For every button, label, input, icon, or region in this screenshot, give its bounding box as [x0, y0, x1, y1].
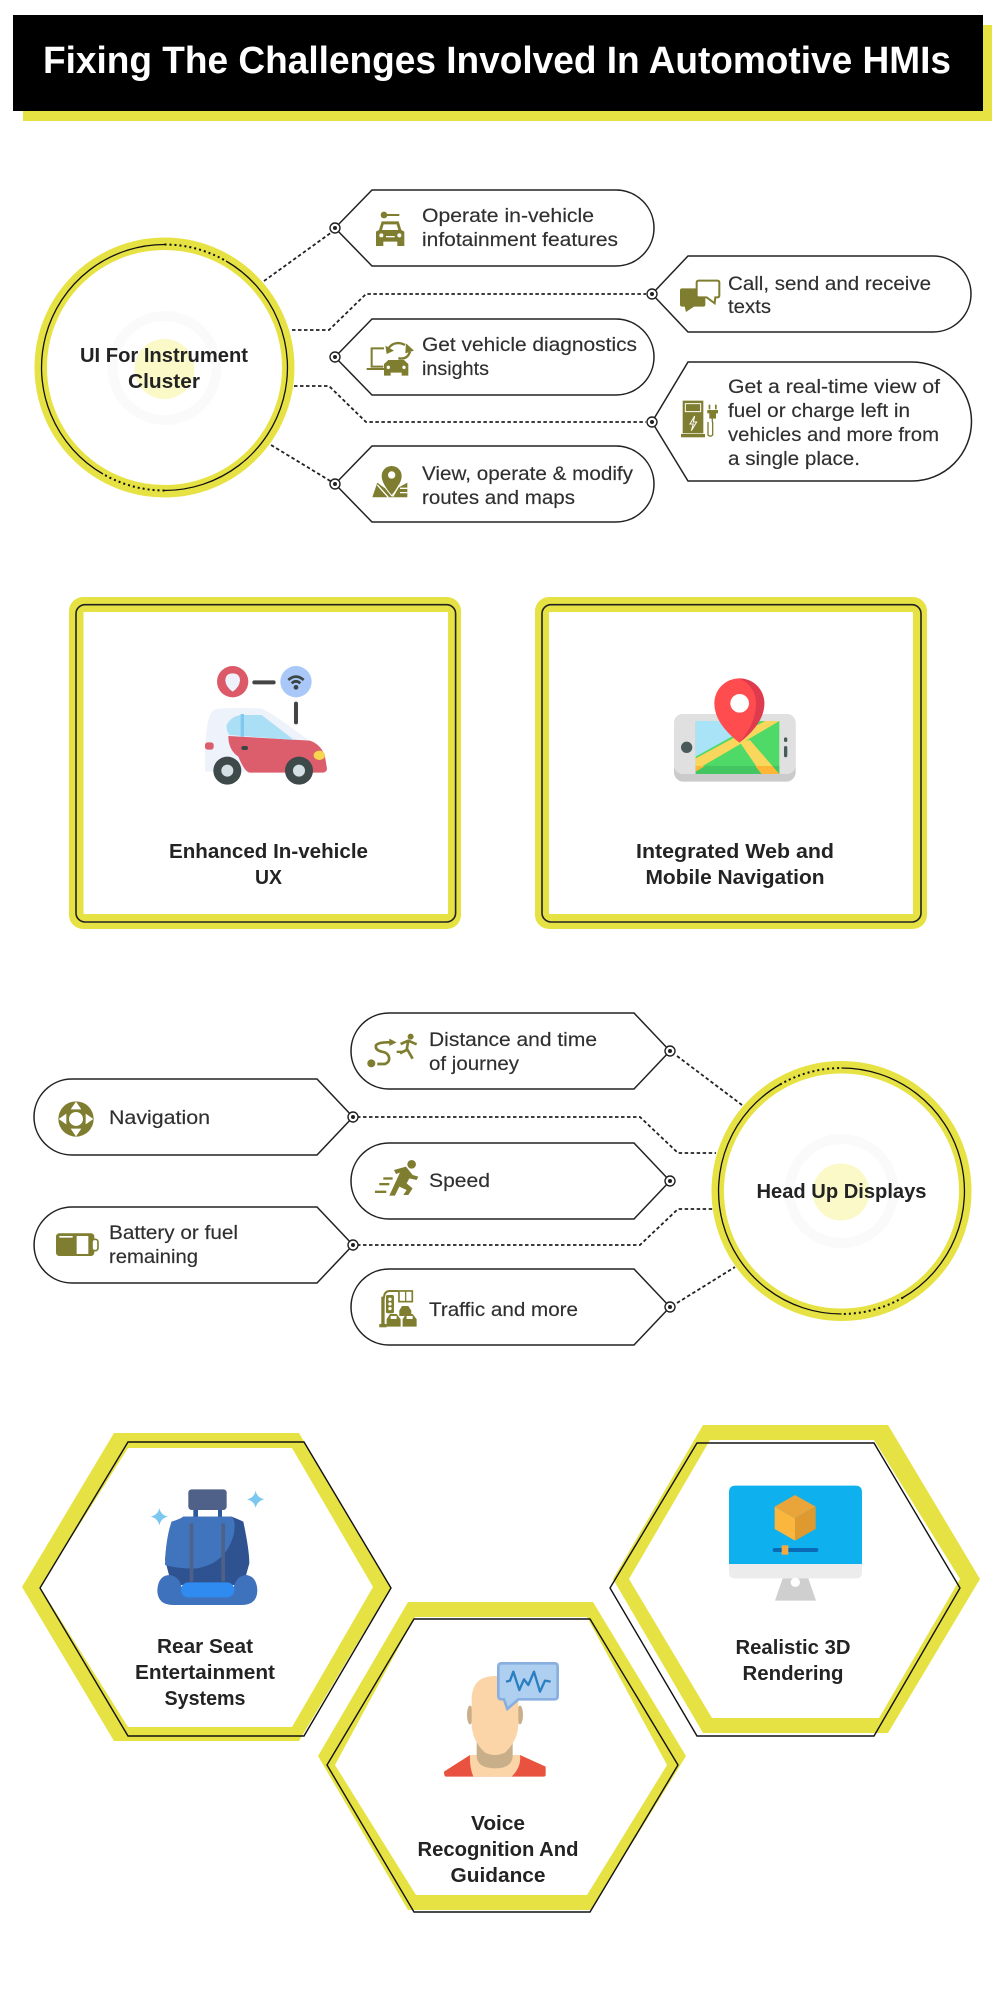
icon: phone with map and pin: [674, 678, 796, 782]
hexagon: Realistic 3D Rendering: [610, 1425, 980, 1736]
hexagon: Voice Recognition And Guidance: [318, 1602, 686, 1912]
card: Enhanced In-vehicle UX: UX: [255, 867, 283, 889]
hexagon: Voice Recognition And Guidance: Recognition And: [418, 1839, 578, 1861]
pill: battery or fuel: remaining: [109, 1246, 198, 1268]
pill: call and texts: [647, 256, 971, 332]
pill: speed: [351, 1143, 675, 1219]
hub circle: UI For Instrument Cluster: Cluster: [128, 371, 200, 393]
card: Enhanced In-vehicle UX: Enhanced In-vehicle: [169, 841, 368, 863]
hexagon: Voice Recognition And Guidance: Guidance: [450, 1865, 546, 1887]
icon: map pin: [372, 466, 407, 497]
pill: infotainment features: [330, 190, 654, 266]
icon: battery: [56, 1233, 98, 1256]
icon: traffic: [379, 1291, 417, 1327]
pill: battery or fuel: [34, 1207, 358, 1283]
pill: distance and time: of journey: [429, 1053, 519, 1075]
hub circle: Head Up Displays: Head Up Displays: [756, 1181, 926, 1203]
icon: head with voice bubble: [444, 1663, 558, 1777]
icon: car with key: [376, 212, 404, 246]
pill: vehicle diagnostics: Get vehicle diagnostics: [422, 334, 637, 356]
hexagon: Rear Seat Entertainment Systems: [22, 1433, 391, 1741]
hexagon: Realistic 3D Rendering: Realistic 3D: [736, 1637, 850, 1659]
connectors: instrument cluster: [264, 232, 646, 482]
pill: navigation: Navigation: [109, 1107, 210, 1129]
pill: real-time fuel view: fuel or charge left in: [728, 400, 910, 422]
pill: real-time fuel view: [647, 362, 972, 481]
pill: routes and maps: routes and maps: [422, 487, 575, 509]
icon: route and runner: [367, 1034, 417, 1067]
hexagon: Rear Seat Entertainment Systems: Entertainment: [135, 1662, 275, 1684]
icon: chat bubbles: [680, 281, 719, 312]
pill: routes and maps: [330, 446, 654, 522]
title banner: [13, 15, 992, 121]
card: Enhanced In-vehicle UX: [69, 597, 461, 929]
icon: diagnostics laptop and car: [367, 343, 414, 376]
hexagon: Realistic 3D Rendering: Rendering: [742, 1663, 844, 1685]
hexagon: Voice Recognition And Guidance: Voice: [471, 1813, 525, 1835]
pill: real-time fuel view: a single place.: [728, 448, 860, 470]
connectors: head up displays: [357, 1056, 742, 1303]
icon: charging station: [681, 401, 718, 437]
hexagon: Rear Seat Entertainment Systems: Systems: [164, 1688, 246, 1710]
card: Integrated Web and Mobile Navigation: Integrated Web and: [636, 841, 834, 863]
pill: navigation: [34, 1079, 358, 1155]
icon: connected car: [205, 666, 327, 785]
card: Integrated Web and Mobile Navigation: [535, 597, 927, 929]
icon: direction pad: [58, 1101, 94, 1137]
pill: call and texts: texts: [728, 296, 771, 318]
icon: sprinter: [375, 1160, 418, 1196]
pill: traffic and more: Traffic and more: [429, 1299, 578, 1321]
pill: call and texts: Call, send and receive: [728, 273, 931, 295]
title banner: Fixing The Challenges Involved In Automotive HMIs: [43, 40, 951, 82]
hub circle: Head Up Displays: [718, 1067, 965, 1315]
pill: vehicle diagnostics: [330, 319, 654, 395]
pill: distance and time: Distance and time: [429, 1029, 597, 1051]
pill: vehicle diagnostics: insights: [422, 358, 489, 380]
hexagon: Rear Seat Entertainment Systems: Rear Seat: [157, 1636, 253, 1658]
pill: real-time fuel view: Get a real-time view of: [728, 376, 941, 398]
hub circle: UI For Instrument Cluster: UI For Instrument: [80, 345, 248, 367]
pill: distance and time: [351, 1013, 675, 1089]
pill: real-time fuel view: vehicles and more from: [728, 424, 939, 446]
pill: battery or fuel: Battery or fuel: [109, 1222, 238, 1244]
card: Integrated Web and Mobile Navigation: Mobile Navigation: [646, 867, 824, 889]
pill: traffic and more: [351, 1269, 675, 1345]
pill: speed: Speed: [429, 1170, 490, 1192]
pill: routes and maps: View, operate & modify: [422, 463, 633, 485]
icon: monitor with cube: [729, 1486, 862, 1601]
icon: car seat: [151, 1489, 264, 1605]
hub circle: UI For Instrument Cluster: [41, 244, 288, 491]
pill: infotainment features: infotainment features: [422, 229, 618, 251]
pill: infotainment features: Operate in-vehicle: [422, 205, 594, 227]
